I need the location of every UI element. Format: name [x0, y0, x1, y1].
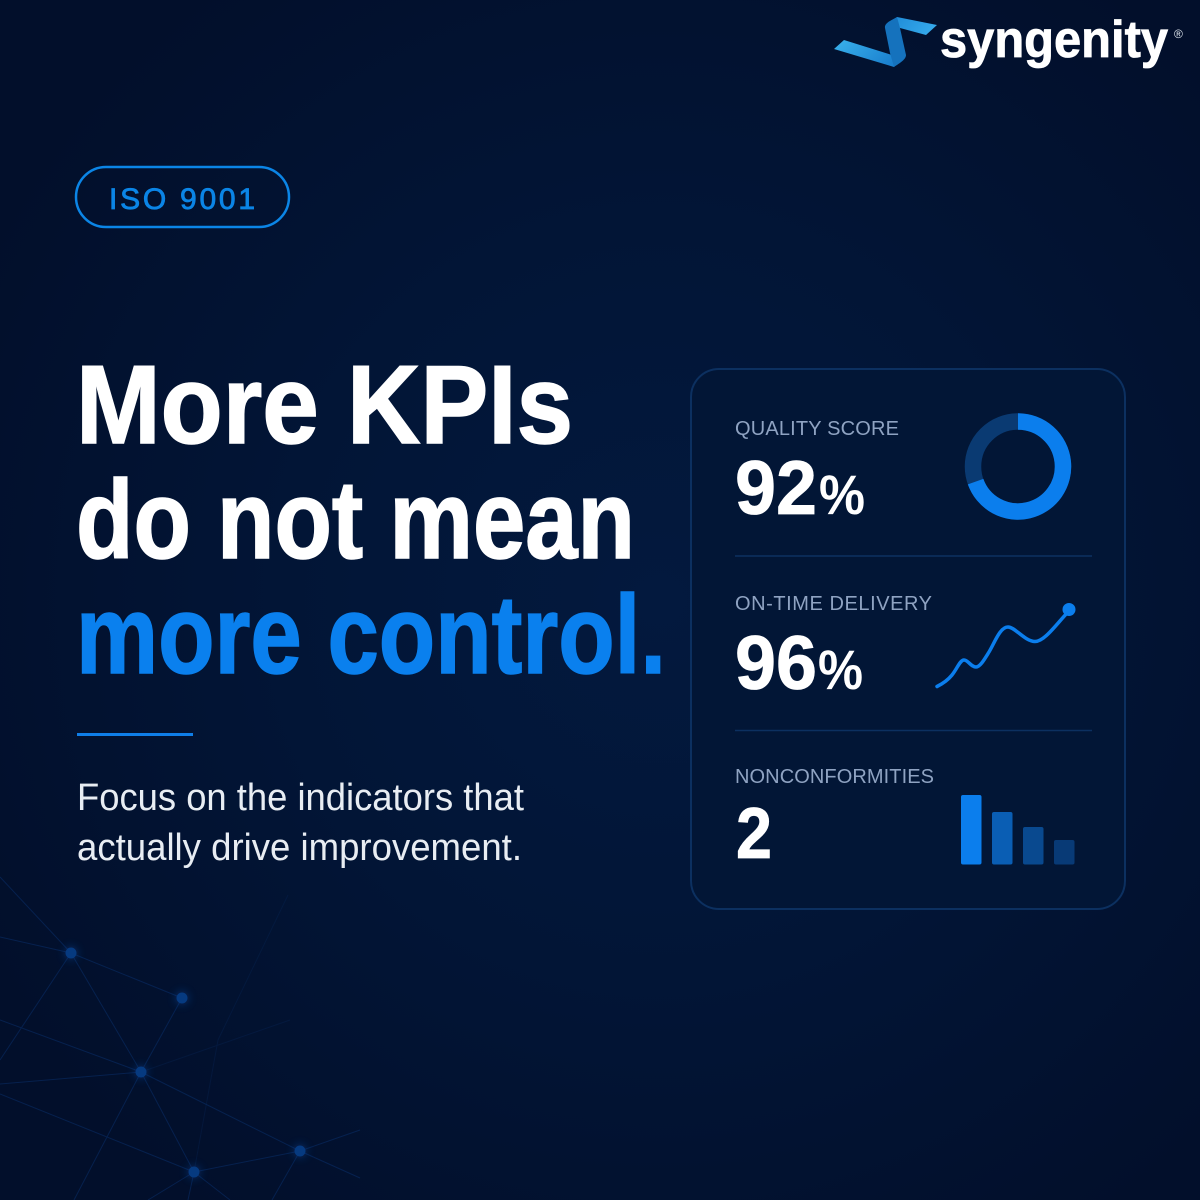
value: 92%: 92 [735, 446, 817, 531]
value: 96% [735, 621, 863, 706]
value: 96%: 96 [735, 621, 817, 706]
accent divider [77, 733, 193, 736]
headline: more control. [76, 573, 666, 697]
headline [76, 343, 666, 697]
label: nonconformities: NONCONFORMITIES [735, 766, 934, 788]
value: 92%: % [819, 463, 865, 526]
donut chart [973, 422, 1063, 512]
subheading: actually drive improvement. [77, 827, 522, 869]
value: 2: 2 [736, 794, 772, 874]
label: on-time delivery: ON-TIME DELIVERY [735, 593, 932, 615]
value: 92% [735, 446, 865, 531]
line chart [937, 603, 1076, 686]
KPI: nonconformities [735, 766, 1074, 874]
bar chart [961, 795, 1074, 864]
badge: ISO 9001: ISO 9001 [109, 183, 255, 216]
panel: KPI dashboard [691, 369, 1125, 909]
KPI: quality score [735, 418, 1063, 531]
value: 96%: % [818, 638, 863, 701]
headline: do not mean [76, 458, 635, 582]
logo: syngenity [834, 11, 1183, 69]
headline: More KPIs [76, 343, 573, 467]
subheading: Focus on the indicators that [77, 777, 524, 819]
network decoration [0, 877, 360, 1200]
icon: ribbon mark [834, 17, 937, 67]
subheading [77, 777, 524, 869]
label: quality score: QUALITY SCORE [735, 418, 899, 440]
badge: ISO 9001 [76, 167, 289, 227]
logo wordmark: syngenity [940, 11, 1168, 69]
registered mark: ® [1174, 27, 1183, 41]
KPI: on-time delivery [735, 593, 1076, 706]
